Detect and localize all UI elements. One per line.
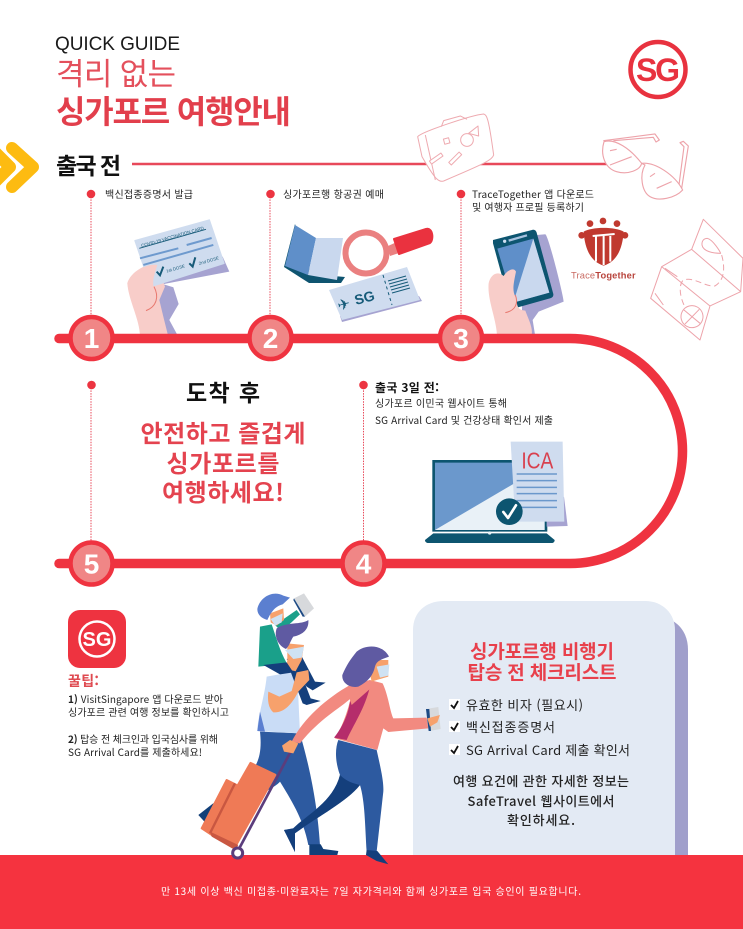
step 1 illustration: hand holding card: COVID-19 VACCINATION CARD	[141, 225, 205, 248]
logo: SG circle: SG	[636, 52, 680, 88]
checklist items: 백신접종증명서	[466, 717, 555, 736]
boarding pass: ✈	[336, 295, 352, 315]
step 1 illustration: hand holding card: 1st DOSE	[166, 263, 186, 274]
child upper body	[257, 593, 326, 690]
checklist note: 확인하세요.	[507, 810, 575, 829]
step 4 text	[375, 379, 553, 427]
tips: SG Arrival Card를 제출하세요!	[68, 744, 202, 759]
step 4 illustration: laptop and ICA document: ICA	[521, 448, 554, 474]
icon: outlined folded map	[651, 219, 743, 340]
icon: SG app	[68, 610, 126, 668]
icon: yellow chevrons	[0, 147, 33, 187]
suitcase	[202, 752, 291, 858]
timeline connectors	[91, 194, 461, 545]
woman	[282, 646, 441, 864]
icon: outlined sunglasses	[603, 134, 688, 199]
marker 1	[70, 317, 112, 359]
step 2 illustration: passport, magnifier, ticket	[284, 224, 432, 322]
passport	[284, 224, 345, 283]
checklist items	[449, 695, 630, 759]
timeline track	[59, 338, 682, 564]
marker 3: 3	[453, 323, 469, 354]
heading: before departure: 출국 전	[56, 147, 121, 181]
section rule	[132, 163, 640, 165]
step 3 illustration: hand holding phone	[488, 230, 564, 337]
step 1 label: 백신접종증명서 발급	[105, 186, 193, 201]
marker 4	[342, 542, 384, 584]
tips: 2) 탑승 전 체크인과 입국심사를 위해	[68, 731, 218, 746]
logo: TraceTogether	[571, 218, 636, 281]
step 1 illustration: hand holding card	[127, 220, 229, 337]
tips: 1) VisitSingapore 앱 다운로드 받아	[68, 691, 223, 706]
checklist note: 여행 요건에 관한 자세한 정보는	[453, 771, 629, 790]
marker 2: 2	[263, 323, 278, 354]
man	[198, 620, 338, 855]
marker 2	[250, 317, 292, 359]
checklist heading	[468, 637, 616, 685]
step 3 label: TraceTogether 앱 다운로드	[472, 186, 594, 201]
checklist items: 유효한 비자 (필요시)	[466, 695, 583, 714]
title block: 격리 없는	[56, 49, 176, 94]
man arm	[268, 670, 309, 712]
step 1 illustration: hand holding card: 2nd DOSE	[198, 255, 220, 266]
marker 5: 5	[84, 548, 99, 580]
panel: checklist	[413, 601, 688, 860]
logo: SG circle	[630, 42, 686, 97]
tips: 꿀팁:	[68, 671, 99, 691]
boarding pass	[329, 267, 422, 322]
footer band	[0, 855, 743, 929]
tips: 싱가포르 관련 여행 정보를 확인하시고	[68, 704, 229, 719]
timeline bullets	[87, 190, 465, 389]
step 2 label: 싱가포르행 항공권 예매	[283, 186, 384, 201]
arrival message: 안전하고 즐겁게	[140, 414, 306, 449]
checklist items: SG Arrival Card 제출 확인서	[466, 740, 630, 759]
title block: QUICK GUIDE	[55, 34, 180, 55]
step 4 illustration: laptop and ICA document	[425, 442, 568, 543]
checklist heading: 탑승 전 체크리스트	[468, 658, 616, 685]
icon: SG app: SG	[83, 629, 111, 651]
title block	[55, 34, 291, 133]
boarding pass: SG	[353, 287, 376, 308]
title block: 싱가포르 여행안내	[56, 87, 291, 133]
marker 4: 4	[356, 548, 372, 580]
step 4 text: 출국 3일 전:	[375, 379, 439, 396]
step 3 label: 및 여행자 프로필 등록하기	[472, 199, 584, 214]
logo: TraceTogether: TraceTogether	[571, 271, 636, 281]
checklist note	[453, 771, 629, 829]
arrival message: 여행하세요!	[162, 473, 284, 508]
heading: after arrival: 도착 후	[186, 374, 260, 408]
checklist note: SafeTravel 웹사이트에서	[468, 791, 614, 810]
checklist heading: 싱가포르행 비행기	[470, 637, 614, 664]
child legs	[263, 662, 321, 705]
arrival message	[140, 414, 306, 508]
magnifier	[346, 229, 432, 274]
icon: outlined suitcase	[418, 114, 494, 181]
marker 5	[70, 542, 112, 584]
arrival message: 싱가포르를	[166, 444, 280, 479]
step 4 text: 싱가포르 이민국 웹사이트 통해	[375, 395, 507, 410]
tips	[68, 671, 229, 759]
footer band: 만 13세 이상 백신 미접종·미완료자는 7일 자가격리와 함께 싱가포르 입국 승인이 필요합니다.	[161, 883, 581, 898]
step 4 text: SG Arrival Card 및 건강상태 확인서 제출	[375, 412, 553, 427]
illustration: travelling family	[198, 593, 441, 864]
marker 3	[440, 317, 482, 359]
marker 1: 1	[84, 323, 99, 354]
